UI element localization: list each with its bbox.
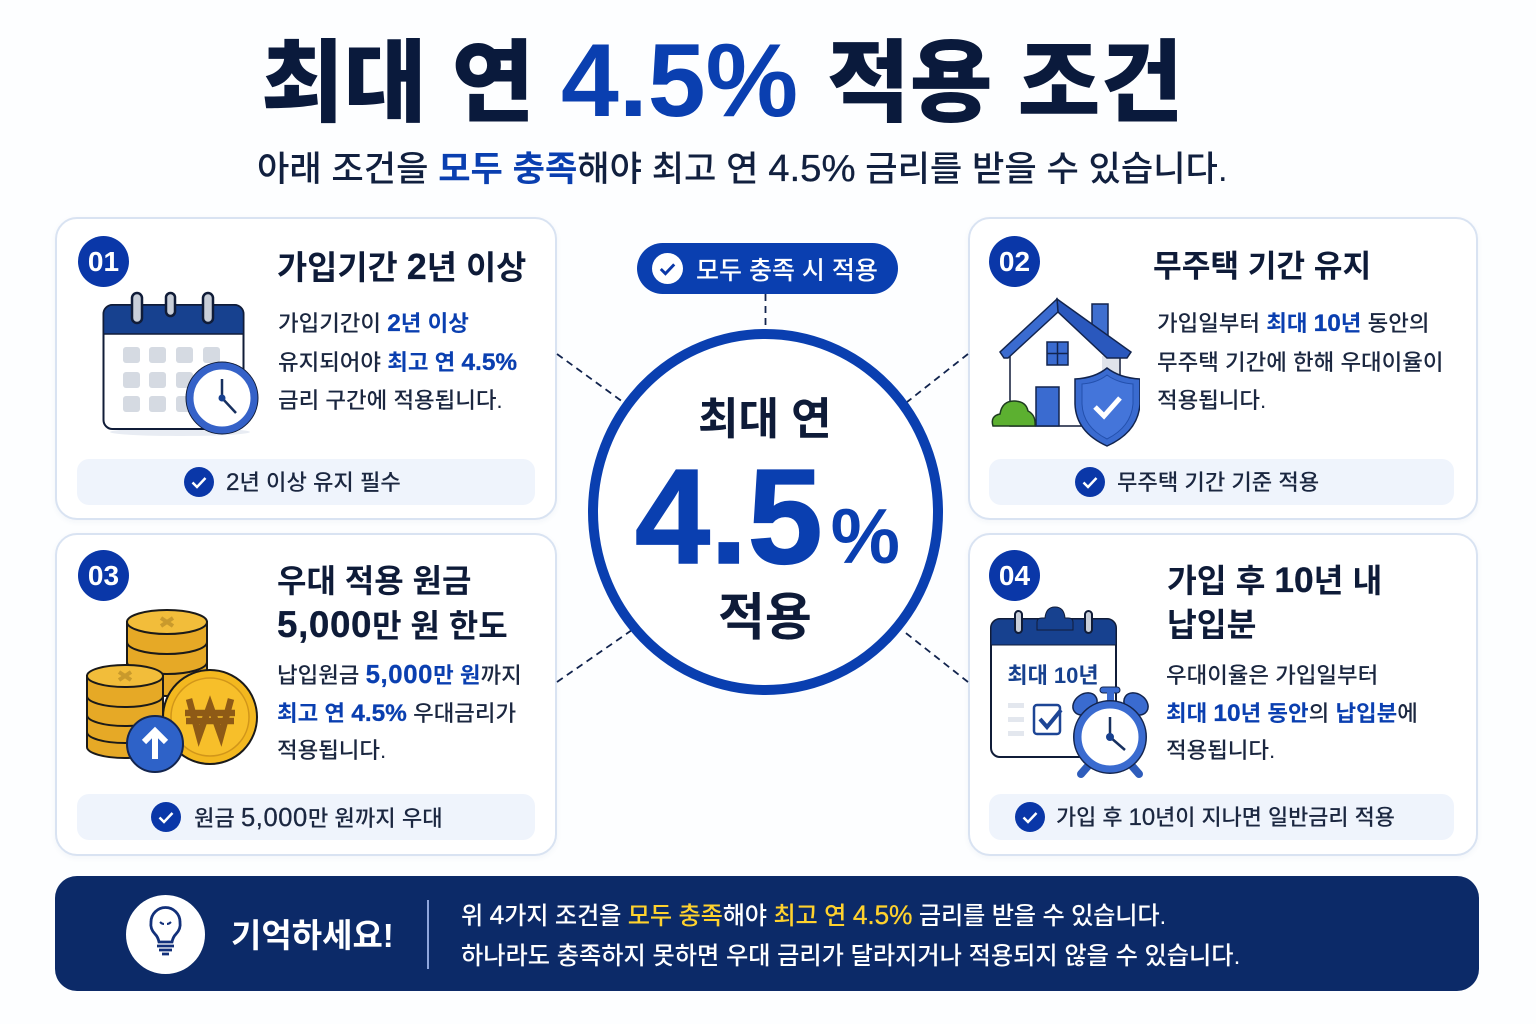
note text: 원금 5,000만 원까지 우대 (194, 804, 443, 832)
badge 01: 01 (88, 246, 119, 277)
icon: check (1075, 467, 1105, 497)
heading 04: 납입분 (1167, 607, 1256, 643)
badge 01 (78, 236, 129, 287)
heading 03: 5,000만 원 한도 (277, 604, 508, 645)
badge 03: 03 (88, 560, 119, 591)
icon: coins (86, 609, 258, 773)
body text 04 (1166, 663, 1418, 763)
circle rate value: 4.5% (635, 441, 900, 592)
center circle: maximum rate (588, 329, 943, 695)
note text: 무주택 기간 기준 적용 (1117, 470, 1319, 495)
body text 01: 금리 구간에 적용됩니다. (278, 388, 503, 413)
calendar label: 최대 10년 (1007, 663, 1099, 688)
note pill 02 (989, 459, 1454, 505)
title part: conditions: 적용 조건 (827, 34, 1183, 134)
reminder banner (55, 876, 1479, 991)
icon: house and shield (992, 298, 1140, 447)
icon: check (151, 802, 181, 832)
heading 01: 가입기간 2년 이상 (277, 247, 526, 287)
banner divider (427, 900, 428, 969)
badge 02 (989, 236, 1040, 287)
title (261, 23, 1183, 139)
title rate: 4.5% (561, 23, 798, 139)
icon: calendar and alarm clock (990, 606, 1149, 778)
banner text (461, 900, 1240, 970)
body text 01 (278, 310, 517, 413)
note text: 2년 이상 유지 필수 (226, 469, 401, 496)
note text: 가입 후 10년이 지나면 일반금리 적용 (1056, 804, 1395, 831)
body text 03: 적용됩니다. (277, 738, 386, 763)
body text 01: 유지되어야 최고 연 4.5% (278, 348, 517, 376)
subtitle: 아래 조건을 모두 충족해야 최고 연 4.5% 금리를 받을 수 있습니다. (257, 147, 1228, 190)
body text 04: 최대 10년 동안의 납입분에 (1166, 700, 1418, 726)
note pill 03 (77, 794, 535, 840)
body text 03: 납입원금 5,000만 원까지 (277, 661, 522, 689)
banner text: 위 4가지 조건을 모두 충족해야 최고 연 4.5% 금리를 받을 수 있습니다. (461, 900, 1166, 930)
title part: maximum annual: 최대 연 (261, 34, 534, 134)
body text 01: 가입기간이 2년 이상 (278, 310, 469, 337)
icon: light bulb (126, 895, 205, 974)
heading 03: 우대 적용 원금 (277, 563, 471, 599)
heading 02: 무주택 기간 유지 (1153, 249, 1371, 284)
panel: condition 02 (968, 217, 1478, 520)
icon: check (184, 467, 214, 497)
note pill 01 (77, 459, 535, 505)
panel: condition 04 (968, 533, 1478, 856)
panel: condition 01 (55, 217, 557, 520)
tag text: 모두 충족 시 적용 (696, 257, 878, 285)
body text 04: 우대이율은 가입일부터 (1166, 663, 1378, 688)
body text 02: 적용됩니다. (1157, 388, 1266, 413)
body text 03 (277, 661, 522, 763)
circle ring (588, 329, 943, 695)
badge 04: 04 (999, 560, 1030, 591)
badge 03 (78, 550, 129, 601)
icon: check (652, 253, 683, 284)
body text 02: 가입일부터 최대 10년 동안의 (1157, 310, 1429, 337)
tag: applies when all met (637, 243, 898, 294)
body text 04: 적용됩니다. (1166, 738, 1275, 763)
circle label bottom: 적용 (718, 589, 812, 646)
body text 02: 무주택 기간에 한해 우대이율이 (1157, 350, 1443, 374)
banner text: 하나라도 충족하지 못하면 우대 금리가 달라지거나 적용되지 않을 수 있습니다. (461, 943, 1240, 970)
heading 03 (277, 563, 508, 645)
badge 04 (989, 550, 1040, 601)
panel: condition 03 (55, 533, 557, 856)
body text 03: 최고 연 4.5% 우대금리가 (277, 700, 516, 726)
body text 02 (1157, 310, 1443, 413)
banner heading: 기억하세요! (231, 917, 394, 954)
circle label top: 최대 연 (698, 395, 832, 444)
note pill 04 (989, 794, 1454, 840)
heading 04: 가입 후 10년 내 (1167, 561, 1382, 600)
heading 04 (1167, 561, 1382, 643)
badge 02: 02 (999, 246, 1030, 277)
icon: calendar and clock (102, 292, 258, 436)
icon: check (1015, 802, 1045, 832)
